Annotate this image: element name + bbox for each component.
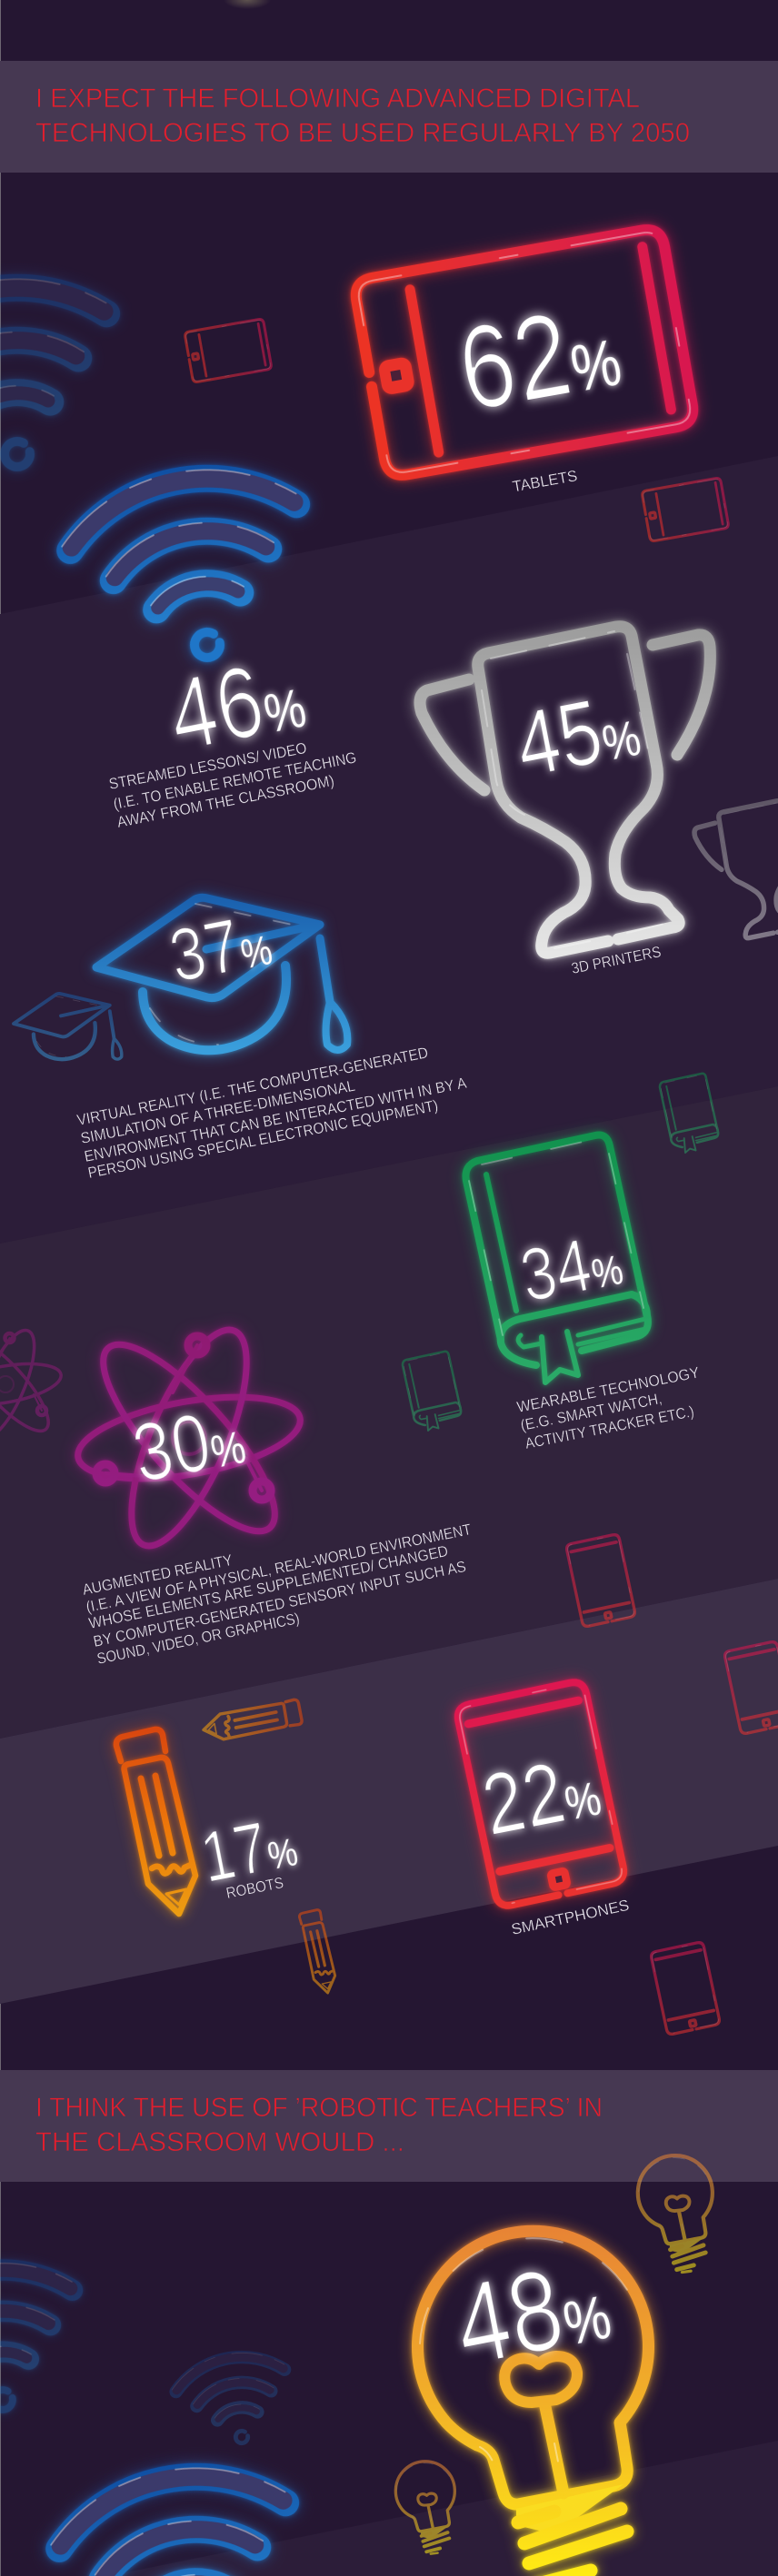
value: 30%: %: [206, 1421, 250, 1478]
label: augmented reality: SOUND, VIDEO, OR GRAPHICS): [95, 1610, 301, 1668]
icon: small graduation cap: [14, 994, 122, 1059]
stat: smartphones 22%: [455, 1679, 631, 1938]
value: 17%: [194, 1802, 303, 1897]
label: virtual reality: PERSON USING SPECIAL ELECTRONIC EQUIPMENT): [86, 1096, 440, 1182]
value: 34%: %: [588, 1246, 626, 1297]
value: 45%: [507, 672, 647, 796]
value: 30%: 30: [125, 1395, 218, 1500]
label: tablets: TABLETS: [511, 467, 579, 495]
value: 62%: [449, 279, 628, 436]
value: 45%: %: [598, 709, 645, 771]
icon: small book upper right: [660, 1074, 718, 1153]
value: 34%: [514, 1217, 628, 1318]
icon: small atom: [0, 1323, 65, 1445]
value: 46%: %: [259, 677, 311, 745]
icon: pencil: [116, 1729, 195, 1914]
label: virtual reality: SIMULATION OF A THREE-DIMENSIONAL: [79, 1077, 356, 1147]
label: wearable technology: WEARABLE TECHNOLOGY: [515, 1363, 701, 1416]
icon: light bulb: [418, 2231, 648, 2576]
label: streamed lessons: STREAMED LESSONS/ VIDEO: [107, 739, 308, 793]
value: 37%: [163, 897, 277, 998]
label: robots: ROBOTS: [224, 1874, 285, 1902]
icon: smartphone: [455, 1679, 626, 1908]
icon: small phone right: [723, 1641, 778, 1734]
icon: small trophy: [694, 801, 778, 938]
icon: small wifi middle: [167, 2343, 301, 2455]
value: 17%: %: [264, 1830, 302, 1878]
icon: dim wifi lower left: [0, 2247, 98, 2429]
label: 3D printers: 3D PRINTERS: [570, 943, 663, 977]
icon: small bulb lower left: [395, 2462, 454, 2554]
label: augmented reality: WHOSE ELEMENTS ARE SUPPLEMENTED/ CHANGED: [87, 1542, 450, 1632]
icon: small pencil lower: [299, 1910, 335, 1993]
label: streamed lessons: (I.E. TO ENABLE REMOTE TEACHING: [112, 748, 358, 813]
label: wearable technology: [515, 1363, 701, 1452]
label: streamed lessons: AWAY FROM THE CLASSROOM): [115, 772, 335, 831]
icon: small phone upper: [565, 1534, 636, 1627]
icon: trophy: [420, 627, 710, 953]
stat: tablets 62%: [354, 227, 695, 495]
icon: graduation cap: [96, 897, 347, 1050]
value: 48%: [445, 2237, 619, 2390]
value: 46%: [160, 636, 313, 772]
icon: dim wifi left: [0, 258, 140, 491]
label: augmented reality: [81, 1521, 473, 1668]
heading: advanced digital technologies: TECHNOLOGIES TO BE USED REGULARLY BY 2050: [35, 118, 690, 148]
value: 48%: %: [558, 2283, 616, 2359]
icon: atom: [72, 1316, 306, 1560]
value: 30%: [125, 1389, 251, 1500]
stat: virtual reality 37%: [75, 897, 468, 1182]
label: streamed lessons: [107, 739, 358, 831]
icon: bright wifi bottom: [41, 2447, 319, 2576]
value: 45%: 45: [507, 679, 611, 796]
icon: small tablet upper: [185, 319, 272, 382]
heading: advanced digital technologies: [0, 61, 778, 173]
label: smartphones: SMARTPHONES: [510, 1897, 631, 1938]
value: 62%: %: [565, 326, 626, 406]
heading: robotic teachers: I THINK THE USE OF ’ROBOTIC TEACHERS’ IN: [35, 2093, 603, 2123]
stat: robots 17%: [116, 1729, 303, 1914]
value: 62%: 62: [449, 287, 580, 436]
value: 48%: 48: [445, 2245, 574, 2390]
value: 22%: %: [561, 1773, 605, 1830]
stat: 3D printers 45%: [420, 627, 710, 977]
stat: streamed lessons 46%: [107, 636, 358, 831]
icon: small tablet lower: [642, 478, 729, 541]
label: augmented reality: BY COMPUTER-GENERATED SENSORY INPUT SUCH AS: [92, 1558, 467, 1650]
value: 22%: [474, 1737, 607, 1854]
icon: small phone lower: [650, 1942, 721, 2035]
label: virtual reality: VIRTUAL REALITY (I.E. THE COMPUTER-GENERATED: [75, 1044, 430, 1129]
value: 22%: 22: [474, 1744, 573, 1854]
heading: robotic teachers: THE CLASSROOM WOULD ...: [35, 2127, 404, 2157]
stat: augmented reality 30%: [72, 1316, 473, 1668]
value: 37%: %: [237, 926, 275, 977]
stat: wearable technology 34%: [465, 1135, 701, 1452]
value: 17%: 17: [194, 1808, 274, 1897]
label: wearable technology: ACTIVITY TRACKER ETC.): [524, 1402, 695, 1452]
icon: book: [465, 1135, 648, 1382]
heading: advanced digital technologies: I EXPECT THE FOLLOWING ADVANCED DIGITAL: [35, 84, 640, 114]
icon: tablet: [354, 227, 695, 478]
icon: small book centre: [403, 1352, 461, 1431]
value: 37%: 37: [163, 903, 247, 998]
icon: bright wifi: [52, 449, 330, 682]
label: augmented reality: AUGMENTED REALITY: [81, 1551, 234, 1599]
stat: robotic teachers 48%: [418, 2231, 648, 2576]
label: augmented reality: (I.E. A VIEW OF A PHYSICAL, REAL-WORLD ENVIRONMENT: [85, 1521, 473, 1616]
value: 34%: 34: [514, 1223, 598, 1318]
label: virtual reality: [75, 1044, 468, 1182]
label: wearable technology: (E.G. SMART WATCH,: [519, 1390, 663, 1434]
value: 46%: 46: [160, 644, 273, 772]
heading: robotic teachers: [0, 2070, 778, 2182]
icon: small bulb upper right: [638, 2155, 713, 2273]
label: virtual reality: ENVIRONMENT THAT CAN BE INTERACTED WITH IN BY A: [83, 1074, 468, 1165]
icon: small pencil horizontal: [204, 1697, 303, 1742]
